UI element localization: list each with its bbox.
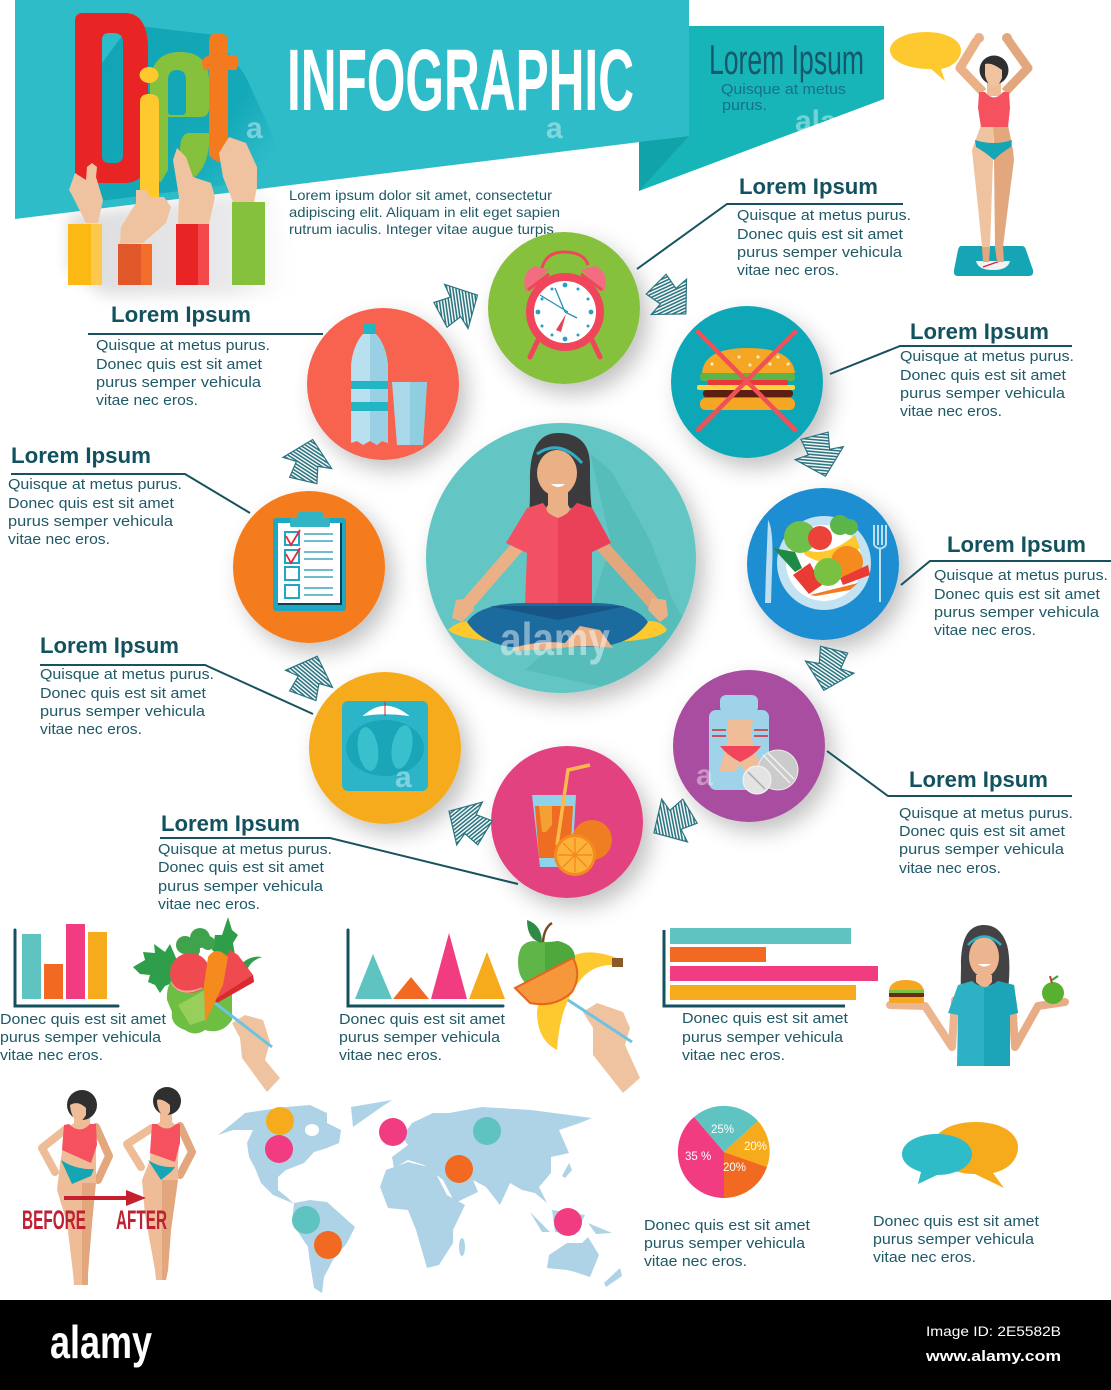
ribbon subtext xyxy=(721,82,846,114)
callout 8: bottle: Quisque at metus purus. xyxy=(96,338,270,354)
website: www.alamy.com xyxy=(925,1348,1061,1365)
lettuce xyxy=(167,975,232,1034)
title banner xyxy=(15,0,689,219)
shirt xyxy=(506,503,611,605)
legs and torso xyxy=(972,125,993,247)
callout 5: juice: purus semper vehicula xyxy=(158,879,324,895)
callout 4: pills: vitae nec eros. xyxy=(899,861,1001,877)
burger xyxy=(889,980,924,1003)
triangle chart text: vitae nec eros. xyxy=(339,1048,442,1064)
callout 1: clock: Donec quis est sit amet xyxy=(737,227,903,243)
arms xyxy=(127,1128,152,1167)
headband xyxy=(537,448,582,463)
triangle chart xyxy=(348,930,505,1006)
horizontal bar chart text: purus semper vehicula xyxy=(682,1030,844,1046)
fork xyxy=(215,1003,272,1047)
callout 2: burger: purus semper vehicula xyxy=(900,386,1066,402)
callout 2: burger: Donec quis est sit amet xyxy=(900,368,1066,384)
icon: meditating woman xyxy=(448,433,668,651)
intro text xyxy=(289,187,560,237)
triangle chart text: Donec quis est sit amet xyxy=(339,1012,505,1028)
arms xyxy=(42,1129,66,1172)
neck xyxy=(987,80,1001,96)
body xyxy=(142,1110,180,1280)
head xyxy=(153,1087,181,1115)
fork xyxy=(568,1000,632,1042)
triangle chart text: purus semper vehicula xyxy=(339,1030,501,1046)
diet lettering with hands xyxy=(68,13,265,285)
pie chart text: vitae nec eros. xyxy=(644,1254,747,1270)
panel: clock circle xyxy=(488,232,640,384)
icon: crossed burger xyxy=(697,332,795,430)
icon: alarm clock xyxy=(524,252,606,357)
callout 2: burger: Quisque at metus purus. xyxy=(900,349,1074,365)
letter i xyxy=(140,67,159,204)
callout 4: pills: Donec quis est sit amet xyxy=(899,824,1065,840)
orange slice xyxy=(515,958,577,1004)
apple xyxy=(518,941,575,985)
hair xyxy=(528,433,593,518)
callout 1: clock: vitae nec eros. xyxy=(737,263,839,279)
alamy logo: alamy xyxy=(50,1316,152,1368)
icon: bathroom scale xyxy=(342,701,428,791)
callout 1: clock: Lorem Ipsum xyxy=(739,174,878,199)
speech bubbles text xyxy=(873,1214,1039,1266)
shirt xyxy=(948,981,1018,1066)
callout 4: pills xyxy=(827,751,1073,877)
watermark a: a xyxy=(246,112,263,145)
mat xyxy=(448,621,667,642)
callout 6: scale: Lorem Ipsum xyxy=(40,633,179,658)
pie chart: 25% xyxy=(711,1124,734,1136)
top xyxy=(978,92,1010,127)
callout 3: plate: vitae nec eros. xyxy=(934,623,1036,639)
callout 4: pills: Quisque at metus purus. xyxy=(899,806,1073,822)
horizontal bar chart xyxy=(664,928,878,1006)
callout 7: clipboard: Quisque at metus purus. xyxy=(8,477,182,493)
process circles xyxy=(233,232,899,898)
footer bar xyxy=(0,1300,1111,1390)
top xyxy=(150,1124,180,1162)
callout 6: scale: Quisque at metus purus. xyxy=(40,667,214,683)
panel: plate circle xyxy=(747,488,899,640)
icon: juice glass with orange xyxy=(532,765,612,876)
callout 6: scale: Donec quis est sit amet xyxy=(40,686,206,702)
world map xyxy=(218,1100,622,1298)
bar chart text xyxy=(0,1012,166,1064)
callout 7: clipboard: Lorem Ipsum xyxy=(11,443,151,468)
top xyxy=(62,1124,97,1163)
hands xyxy=(69,137,257,244)
alamy watermark: alamy xyxy=(500,613,610,665)
body xyxy=(57,1112,96,1285)
callout 7: clipboard xyxy=(8,443,250,548)
image id: Image ID: 2E5582B xyxy=(926,1323,1061,1339)
callout 6: scale: vitae nec eros. xyxy=(40,722,142,738)
woman on scale figure xyxy=(890,32,1033,276)
icon: checklist clipboard xyxy=(273,512,346,611)
callout 3: plate: Donec quis est sit amet xyxy=(934,587,1100,603)
label: after: AFTER xyxy=(116,1205,167,1235)
letter D xyxy=(75,13,148,183)
pepper xyxy=(212,950,254,1002)
legs xyxy=(467,603,648,647)
callout 8: bottle: purus semper vehicula xyxy=(96,375,262,391)
letter t xyxy=(202,33,238,162)
arrow xyxy=(64,1190,146,1206)
icon: water bottle and glass xyxy=(351,324,427,445)
intro text: Lorem ipsum dolor sit amet, consectetur xyxy=(289,187,552,203)
speech bubbles text: Donec quis est sit amet xyxy=(873,1214,1039,1230)
callout 5: juice xyxy=(158,811,518,913)
panel: clipboard circle xyxy=(233,491,385,643)
pie chart text xyxy=(644,1218,810,1270)
arrows between circles xyxy=(279,266,858,854)
callout 8: bottle: Donec quis est sit amet xyxy=(96,357,262,373)
panel: pills circle xyxy=(673,670,825,822)
callout 1: clock xyxy=(637,174,911,279)
panel: pills circle: a xyxy=(696,759,713,792)
tomato xyxy=(170,953,210,993)
sleeves xyxy=(68,202,265,285)
panel: burger circle xyxy=(671,306,823,458)
triangle chart text xyxy=(339,1012,505,1064)
watermark a: a xyxy=(546,112,563,145)
callout 3: plate: Quisque at metus purus. xyxy=(934,568,1108,584)
callout 1: clock: purus semper vehicula xyxy=(737,245,903,261)
hair xyxy=(961,925,1009,990)
callout 4: pills: Lorem Ipsum xyxy=(909,767,1048,792)
neck and face xyxy=(546,490,570,518)
before and after figures xyxy=(22,1087,192,1285)
icon: salad plate with cutlery xyxy=(765,515,886,610)
callout 8: bottle: Lorem Ipsum xyxy=(111,302,251,327)
ribbon subtext: purus. xyxy=(722,98,767,114)
ribbon heading: Lorem Ipsum xyxy=(709,36,864,83)
pie chart: 20% xyxy=(744,1141,767,1153)
pie chart xyxy=(678,1106,770,1198)
head xyxy=(980,56,1008,84)
carrot xyxy=(204,951,228,1023)
panel: bottle circle xyxy=(307,308,459,460)
icon: pill bottle xyxy=(709,695,798,794)
callout 7: clipboard: vitae nec eros. xyxy=(8,532,110,548)
feet xyxy=(513,626,613,651)
bar chart text: vitae nec eros. xyxy=(0,1048,103,1064)
callout 6: scale xyxy=(40,633,313,738)
pie chart: 20% xyxy=(723,1162,746,1174)
central meditation circle xyxy=(426,423,700,695)
face xyxy=(976,975,992,987)
pie chart text: purus semper vehicula xyxy=(644,1236,806,1252)
horizontal bar chart text xyxy=(682,1011,848,1064)
bar chart text: Donec quis est sit amet xyxy=(0,1012,166,1028)
panel: scale circle: a xyxy=(395,761,412,794)
intro text: adipiscing elit. Aliquam in elit eget sapien xyxy=(289,204,560,220)
bar chart text: purus semper vehicula xyxy=(0,1030,162,1046)
label: before: BEFORE xyxy=(22,1205,86,1235)
scale xyxy=(954,246,1033,276)
head xyxy=(67,1090,97,1120)
callout 7: clipboard: purus semper vehicula xyxy=(8,514,174,530)
speech bubbles text: vitae nec eros. xyxy=(873,1250,976,1266)
arms xyxy=(890,1000,955,1047)
top leaf xyxy=(212,917,238,960)
callout 7: clipboard: Donec quis est sit amet xyxy=(8,496,174,512)
callout 3: plate: purus semper vehicula xyxy=(934,605,1100,621)
callout 5: juice: Lorem Ipsum xyxy=(161,811,300,836)
callout 3: plate xyxy=(901,532,1111,639)
callout 4: pills: purus semper vehicula xyxy=(899,842,1065,858)
secondary ribbon: ala xyxy=(795,105,837,138)
icon: vegetables on a fork with hand xyxy=(133,917,280,1092)
callout 8: bottle xyxy=(88,302,323,409)
secondary ribbon xyxy=(639,26,884,191)
callout 1: clock: Quisque at metus purus. xyxy=(737,208,911,224)
panel: scale circle xyxy=(309,672,461,824)
callout 2: burger xyxy=(830,319,1074,420)
callout 5: juice: Donec quis est sit amet xyxy=(158,860,324,876)
callout 8: bottle: vitae nec eros. xyxy=(96,393,198,409)
title: INFOGRAPHIC xyxy=(287,32,634,129)
apple xyxy=(1042,976,1064,1004)
bikini xyxy=(975,140,1012,160)
intro text: rutrum iaculis. Integer vitae augue turpis. xyxy=(289,221,558,237)
pie chart text: Donec quis est sit amet xyxy=(644,1218,810,1234)
callout 6: scale: purus semper vehicula xyxy=(40,704,206,720)
map markers xyxy=(265,1107,582,1259)
pie chart: 35 % xyxy=(685,1151,711,1163)
speech bubble yellow xyxy=(890,32,961,81)
icon: fruits on a fork with hand xyxy=(515,920,640,1093)
headband xyxy=(968,936,1001,945)
callout 2: burger: Lorem Ipsum xyxy=(910,319,1049,344)
long shadow below banner xyxy=(68,190,305,296)
hand xyxy=(232,1015,280,1092)
bar chart xyxy=(15,924,118,1006)
callout 3: plate: Lorem Ipsum xyxy=(947,532,1086,557)
before figure xyxy=(42,1090,109,1285)
speech bubbles text: purus semper vehicula xyxy=(873,1232,1035,1248)
hand xyxy=(583,1003,640,1093)
banana xyxy=(537,952,622,1050)
callout 2: burger: vitae nec eros. xyxy=(900,404,1002,420)
arms xyxy=(466,546,518,606)
panel: juice circle xyxy=(491,746,643,898)
callout 5: juice: Quisque at metus purus. xyxy=(158,842,332,858)
bikini xyxy=(61,1160,94,1184)
letter e xyxy=(150,52,209,182)
callout 5: juice: vitae nec eros. xyxy=(158,897,260,913)
broccoli xyxy=(176,928,215,958)
arms xyxy=(960,40,983,92)
horizontal bar chart text: vitae nec eros. xyxy=(682,1048,785,1064)
after figure xyxy=(127,1087,192,1280)
ribbon subtext: Quisque at metus xyxy=(721,82,846,98)
bikini xyxy=(148,1160,175,1180)
horizontal bar chart text: Donec quis est sit amet xyxy=(682,1011,848,1027)
icon: speech bubbles xyxy=(902,1122,1018,1188)
woman holding burger and apple xyxy=(889,925,1065,1066)
parsley xyxy=(133,944,183,993)
